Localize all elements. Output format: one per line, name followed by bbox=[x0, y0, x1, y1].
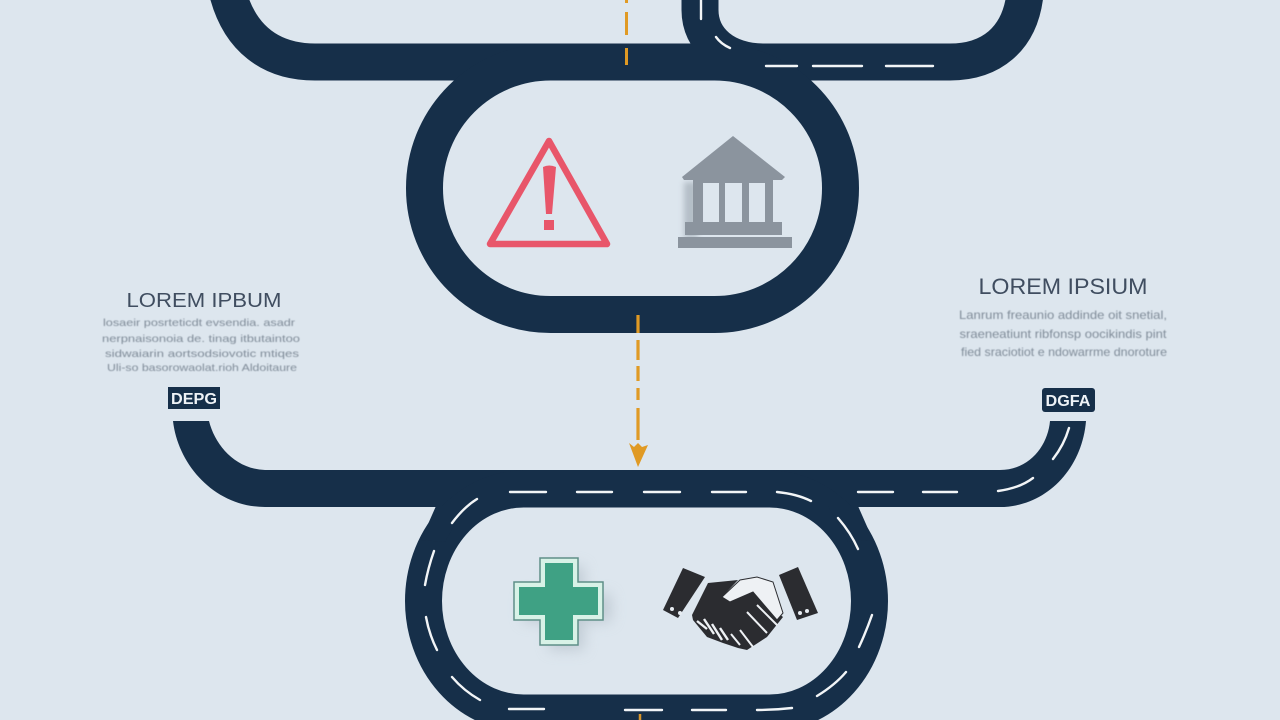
right body text: sraeneatiunt ribfonsp oocikindis pint bbox=[960, 327, 1167, 341]
lower road lane markings bbox=[510, 428, 1069, 501]
right body text: Lanrum freaunio addinde oit snetial, bbox=[959, 308, 1167, 322]
lower oval lane markings bbox=[425, 499, 872, 710]
icon: handshake bbox=[663, 567, 818, 650]
top road lane markings bbox=[701, 0, 933, 66]
top road bbox=[228, 0, 1025, 62]
left badge bbox=[168, 387, 220, 409]
left body text bbox=[102, 317, 300, 374]
right badge bbox=[1042, 388, 1095, 412]
left badge: DEPG bbox=[171, 391, 217, 408]
right body text: fied sraciotiot e ndowarrme dnoroture bbox=[961, 345, 1167, 359]
lower oval road bbox=[421, 489, 873, 713]
icon: bank building bbox=[678, 136, 792, 248]
left body text: Uli-so basorowaolat.rioh Aldoitaure bbox=[107, 362, 297, 374]
middle oval road bbox=[424, 62, 840, 314]
right body text bbox=[959, 308, 1167, 359]
left body text: losaeir posrteticdt evsendia. asadr bbox=[103, 317, 296, 329]
left body text: sidwaiarin aortsodsiovotic mtiqes bbox=[105, 348, 299, 360]
icon: warning triangle bbox=[490, 141, 607, 244]
bottom arrow stub bbox=[639, 714, 641, 720]
top dashed arrow line bbox=[625, 0, 628, 65]
left heading: LOREM IPBUM bbox=[126, 289, 282, 312]
right heading: LOREM IPSIUM bbox=[978, 274, 1148, 299]
icon: green cross bbox=[514, 558, 611, 650]
left body text: nerpnaisonoia de. tinag itbutaintoo bbox=[102, 333, 300, 345]
middle dashed arrow bbox=[629, 315, 648, 467]
lower road bbox=[173, 421, 1086, 507]
right badge: DGFA bbox=[1046, 393, 1091, 410]
